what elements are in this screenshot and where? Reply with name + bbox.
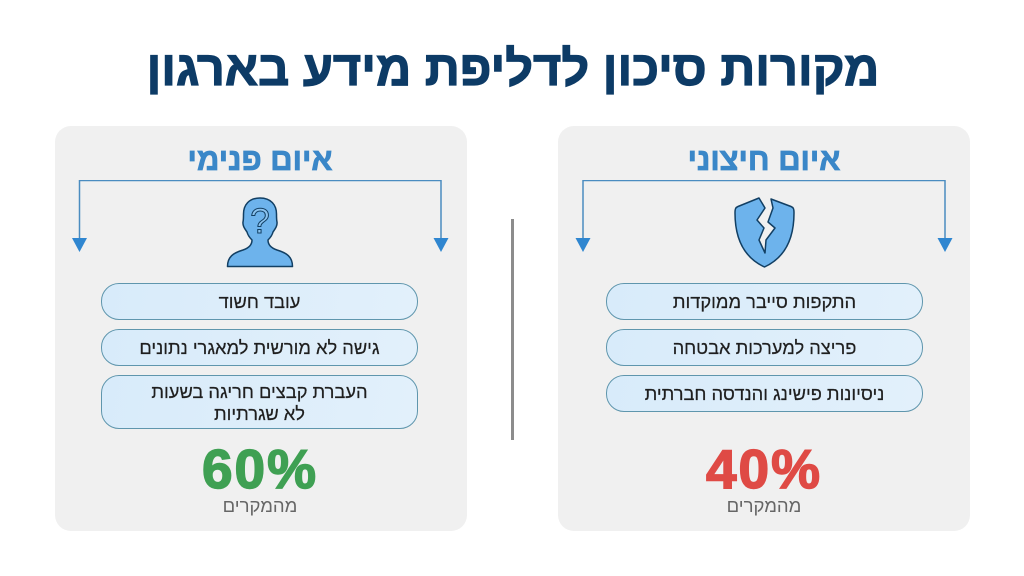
- caption: internal: מהמקרים: [223, 495, 297, 516]
- statistic: 40%: 40%: [706, 438, 822, 500]
- title: מקורות סיכון לדליפת מידע בארגון: [147, 42, 879, 96]
- list item: security breach: [606, 329, 923, 366]
- list item: phishing: ניסיונות פישינג והנדסה חברתית: [645, 383, 884, 404]
- panel: external threat: [558, 126, 970, 531]
- list item: file transfer: [101, 375, 418, 429]
- caption: external: מהמקרים: [727, 495, 801, 516]
- list item: file transfer: העברת קבצים חריגה בשעות: [151, 381, 368, 402]
- heading: external threat: איום חיצוני: [688, 142, 840, 177]
- list item: suspicious employee: [101, 283, 418, 320]
- divider: [510, 219, 514, 440]
- list item: phishing: [606, 375, 923, 412]
- list item: file transfer: לא שגרתיות: [214, 402, 305, 424]
- icon: broken shield: [734, 197, 795, 268]
- panel: internal threat: [55, 126, 467, 531]
- list item: suspicious employee: עובד חשוד: [219, 291, 300, 312]
- arrow: external threat bracket: [576, 180, 952, 252]
- statistic: 60%: 60%: [202, 438, 318, 500]
- list item: unauthorized access: [101, 329, 418, 366]
- icon: person with question mark: ?: [250, 202, 270, 241]
- icon: person with question mark: [226, 197, 294, 268]
- arrow: internal threat bracket: [72, 180, 448, 252]
- list item: targeted cyber attacks: התקפות סייבר ממוקדות: [673, 291, 856, 312]
- list item: security breach: פריצה למערכות אבטחה: [673, 337, 856, 358]
- list item: targeted cyber attacks: [606, 283, 923, 320]
- heading: internal threat: איום פנימי: [188, 142, 332, 177]
- list item: unauthorized access: גישה לא מורשית למאגרי נתונים: [139, 337, 380, 358]
